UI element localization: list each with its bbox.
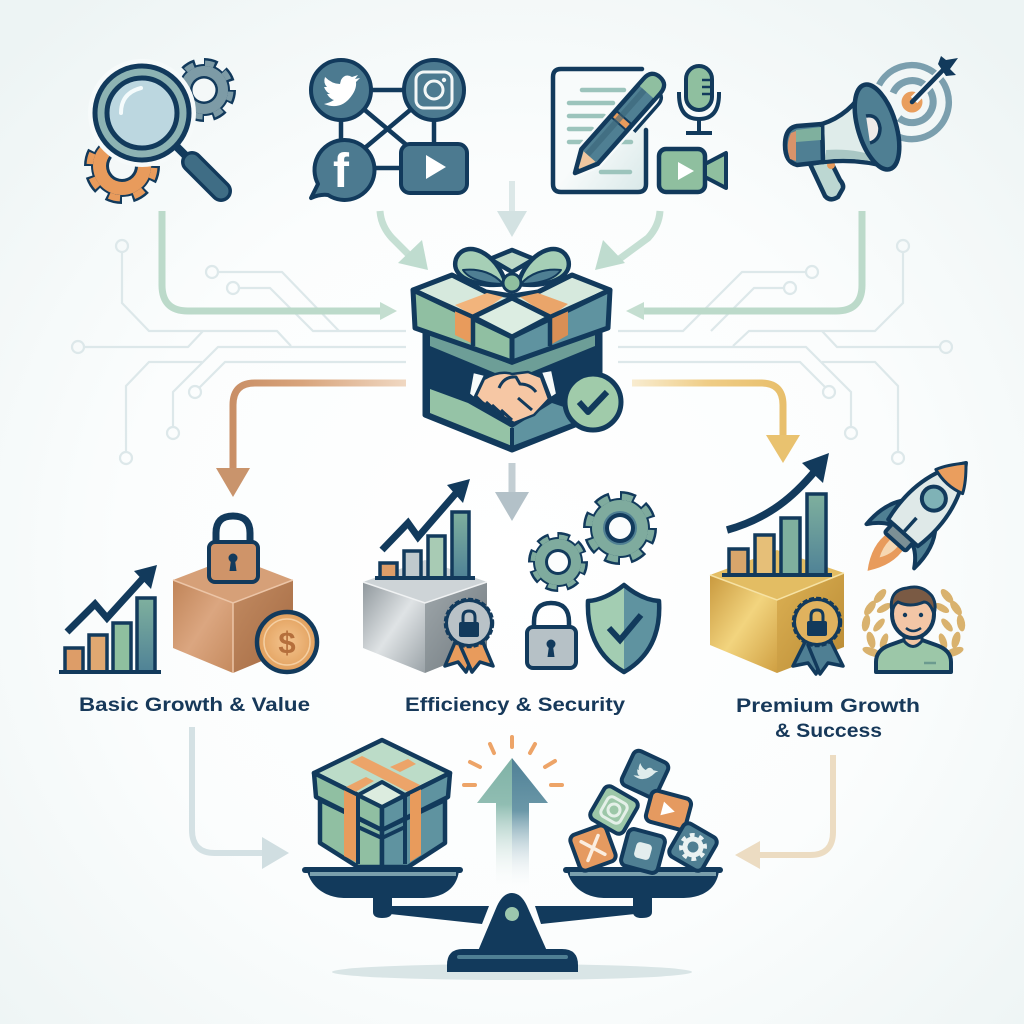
label: & Success (775, 720, 882, 742)
icon: balance scale (302, 867, 723, 980)
icon: research magnifier and gears (88, 59, 232, 200)
tile: tools (569, 824, 617, 872)
label: Basic Growth & Value (79, 694, 310, 716)
bell (846, 79, 908, 175)
handshake (469, 370, 557, 423)
icon: orange gear (88, 132, 156, 200)
icon: grey gear (176, 62, 232, 118)
circuit lines: right (618, 240, 952, 464)
icon: megaphone and target (785, 56, 958, 199)
tile: square (620, 828, 666, 874)
icon: handle (176, 146, 221, 191)
rear (785, 124, 823, 165)
icon: instagram circle (404, 60, 464, 120)
panel: premium growth and success (710, 441, 990, 742)
icon: gold box (710, 550, 844, 673)
icon: padlock (209, 516, 258, 582)
connectors (341, 90, 434, 168)
label (736, 695, 920, 742)
arrow: lower left to balance (192, 727, 289, 869)
icon: content creation (553, 66, 726, 192)
tile: twitter (620, 749, 670, 799)
icon: facebook bubble: f (333, 145, 350, 198)
arrow: content to bundle (595, 211, 660, 270)
panel: efficiency and security (363, 479, 659, 716)
bar chart (59, 565, 161, 672)
icon: twitter circle (311, 60, 371, 120)
left pan (302, 867, 463, 898)
pen (567, 70, 673, 184)
icon: small gear (532, 536, 584, 588)
circuit lines: left (72, 240, 406, 464)
box body (425, 325, 600, 450)
shadow (332, 964, 692, 980)
icon: facebook bubble (311, 140, 375, 200)
label: Efficiency & Security (405, 694, 625, 716)
document (553, 69, 646, 192)
icon: social network (311, 60, 467, 200)
right pan (563, 867, 723, 898)
icon: coin (257, 612, 317, 672)
icon: silver box (363, 560, 487, 673)
handle (810, 160, 843, 199)
stand (447, 893, 578, 972)
icon: bronze box (173, 557, 293, 673)
tile: gear (667, 821, 719, 873)
target (879, 56, 958, 139)
icon: lens (95, 66, 189, 160)
icon: laurels (861, 587, 966, 659)
arrow: bundle to basic tier (216, 383, 406, 497)
arrow: promotion to bundle (626, 211, 862, 320)
cone (822, 87, 892, 168)
icon: padlock (527, 603, 576, 668)
bar chart (722, 494, 832, 575)
panel: basic growth and value (59, 516, 317, 716)
bow (455, 249, 569, 292)
arrow: lower right to balance (735, 755, 833, 869)
icon: gift on scale (314, 740, 450, 867)
icon: person (876, 587, 951, 672)
arrow: social to bundle (380, 211, 428, 270)
icon: video tile (401, 144, 467, 193)
bar chart (375, 479, 475, 578)
icon: microphone (679, 66, 719, 133)
icon: shield (588, 585, 659, 672)
icon: coin: $ (278, 625, 296, 660)
arrow: top centre to bundle (497, 181, 527, 237)
icon: social tiles on scale (569, 749, 719, 874)
icon: growth arrow with rays (464, 737, 562, 890)
growth arrow (727, 453, 829, 530)
icon: video camera (659, 149, 726, 192)
icon: rocket (844, 441, 990, 593)
icon: gold rosette (793, 598, 843, 674)
icon: silver rosette (445, 599, 493, 672)
arrow: bundle to efficiency tier (495, 463, 529, 521)
icon: large gear (588, 496, 652, 560)
tile: instagram (588, 784, 640, 836)
label: Premium Growth (736, 695, 920, 717)
arrow: bundle to premium tier (632, 383, 800, 463)
beam (373, 895, 652, 924)
tile: video (645, 789, 692, 831)
check badge (565, 374, 621, 430)
arrow: research to bundle (162, 211, 397, 320)
icon: central gift bundle (413, 249, 621, 450)
lid (413, 275, 610, 362)
